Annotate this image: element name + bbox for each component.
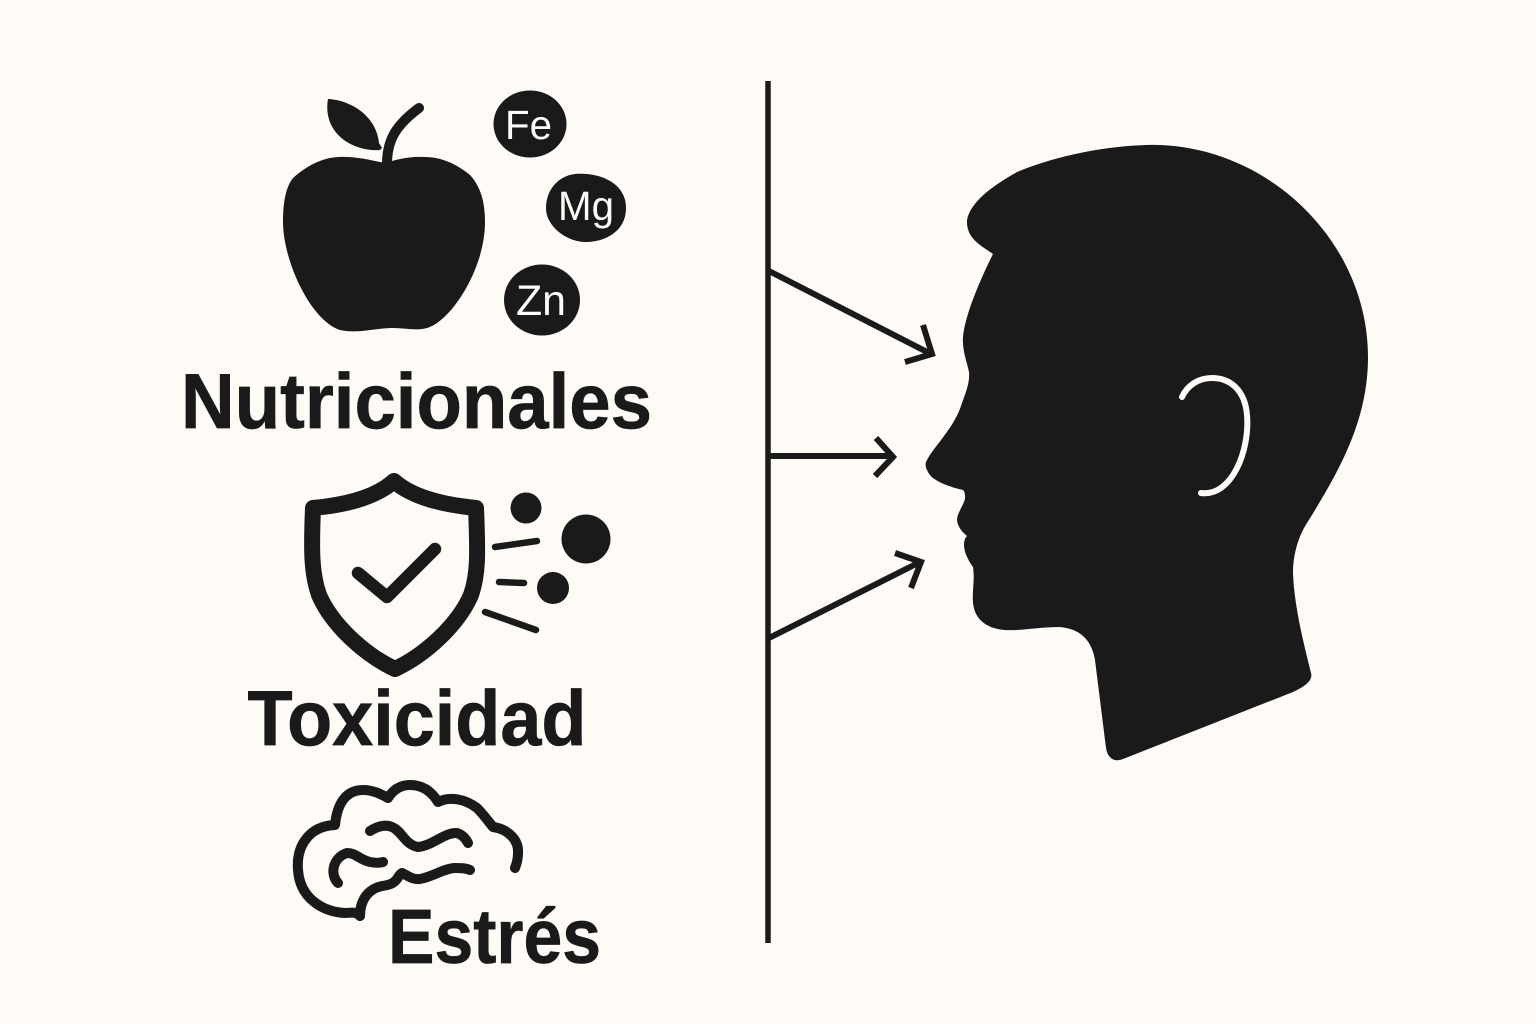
icon: Fe mineral: Fe — [505, 102, 552, 148]
heading: Nutricionales: Nutricionales — [181, 357, 652, 445]
heading: Estrés: Estrés — [388, 894, 601, 980]
arrow: upper — [769, 271, 932, 362]
icon: Fe mineral — [494, 90, 566, 158]
arrow: middle — [769, 438, 893, 476]
icon: toxic particles — [485, 492, 610, 630]
icon: Mg mineral: Mg — [558, 183, 614, 229]
icon: apple — [283, 99, 485, 331]
heading: Toxicidad: Toxicidad — [248, 674, 586, 762]
icon: Zn mineral: Zn — [516, 277, 566, 325]
divider line — [765, 81, 771, 943]
icon: ear outline — [1182, 378, 1247, 493]
icon: Zn mineral — [504, 264, 580, 336]
arrow: lower — [769, 553, 921, 638]
icon: head silhouette — [926, 145, 1368, 760]
icon: brain — [298, 785, 518, 916]
icon: shield with check — [312, 481, 477, 669]
icon: Mg mineral — [546, 174, 626, 242]
